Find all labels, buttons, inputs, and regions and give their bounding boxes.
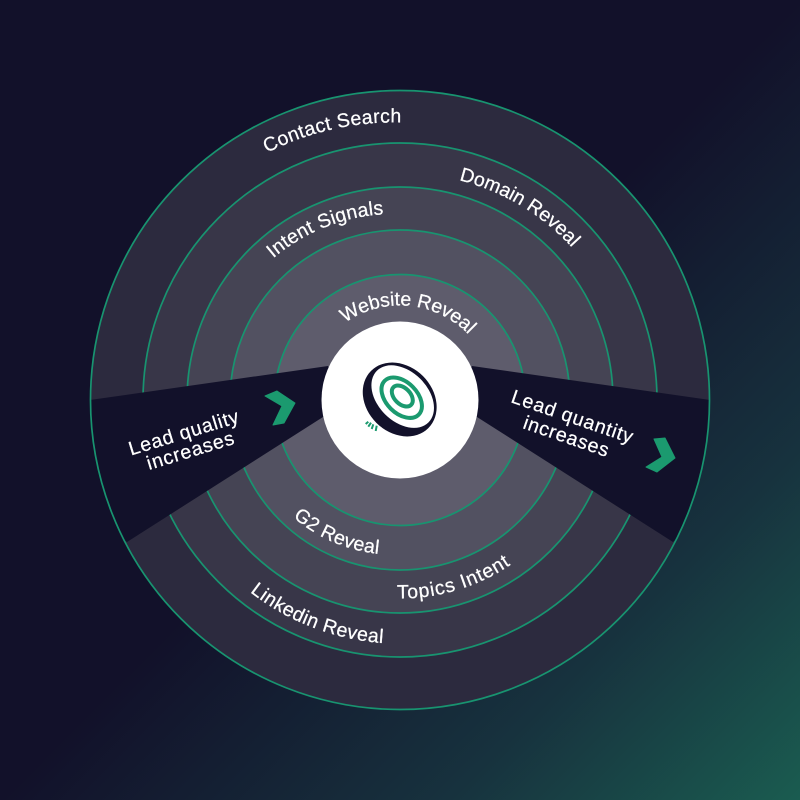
icon: onion logo	[348, 348, 452, 451]
text: Lead quality increases: Lead quality	[126, 406, 242, 460]
label: Intent Signals: Intent Signals	[266, 201, 383, 258]
onion body	[348, 348, 452, 451]
label: Contact Search: Contact Search	[264, 108, 400, 151]
left wedge: lead quality	[92, 366, 328, 542]
text: Lead quantity increases: increases	[520, 412, 612, 462]
arrow: left chevron	[265, 391, 295, 425]
outer ring outline	[90, 90, 710, 710]
right wedge: lead quantity	[472, 366, 708, 542]
inner green layer	[388, 382, 417, 410]
label: G2 Reveal: G2 Reveal	[296, 509, 379, 554]
onion cut face	[359, 353, 446, 440]
onion roots	[366, 422, 377, 431]
concentric rings diagram	[90, 90, 710, 710]
text: Lead quality increases: increases	[144, 427, 238, 475]
label: Linkedin Reveal: Linkedin Reveal	[251, 582, 383, 644]
arrow: right chevron	[646, 438, 675, 472]
label: Domain Reveal: Domain Reveal	[460, 168, 582, 247]
center white circle	[322, 322, 478, 478]
label: Topics Intent: Topics Intent	[397, 555, 511, 602]
text: Lead quantity increases: Lead quantity	[508, 386, 637, 448]
label: Website Reveal: Website Reveal	[338, 291, 478, 334]
outer green layer	[374, 370, 430, 426]
